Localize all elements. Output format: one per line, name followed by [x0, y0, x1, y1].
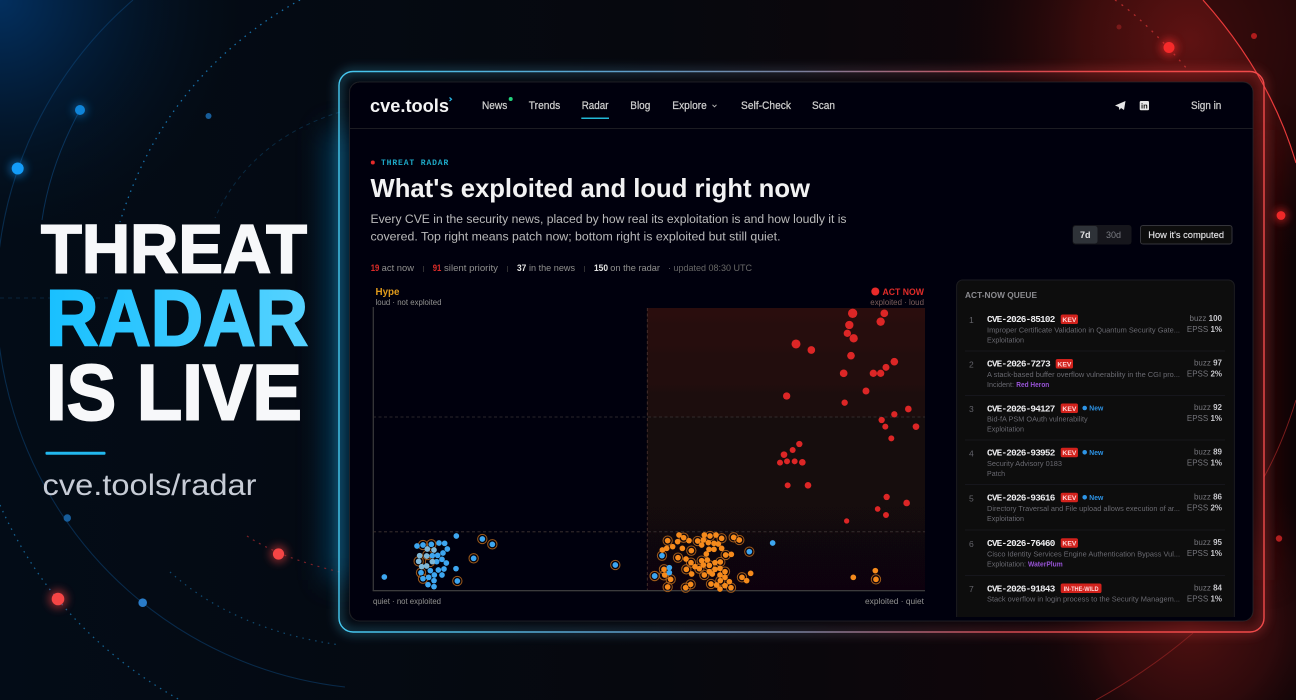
top navigation: Self-Check — [741, 100, 792, 112]
row 4: CVE-2026-93952 — [987, 448, 1056, 459]
queue heading: ACT-NOW QUEUE — [965, 290, 1037, 300]
page title: What's exploited and loud right now — [370, 175, 811, 203]
row 5 — [969, 492, 1223, 523]
row 1: EPSS 1% — [1187, 325, 1222, 334]
row 5: Exploitation — [987, 514, 1024, 523]
row 6 — [969, 538, 1223, 568]
row 3 — [969, 403, 1223, 434]
row 1: buzz 100 — [1190, 314, 1223, 323]
eyebrow: THREAT RADAR — [381, 159, 448, 168]
row 2: Red Heron — [1016, 380, 1050, 389]
row 6: EPSS 1% — [1187, 549, 1222, 558]
row 3: KEV — [1062, 406, 1077, 413]
row 5: CVE-2026-93616 — [987, 493, 1056, 504]
stats line: 37 — [517, 263, 526, 273]
headline — [41, 210, 308, 436]
row 1 — [969, 314, 1223, 344]
top navigation: Blog — [630, 100, 650, 112]
chart labels: exploited · quiet — [865, 597, 925, 606]
row 1: KEV — [1062, 317, 1077, 324]
background radar arcs, left — [0, 0, 345, 700]
row 4: EPSS 1% — [1187, 458, 1222, 468]
stats line: on the radar — [610, 263, 660, 273]
stats line: 19 — [371, 263, 379, 273]
row 4: buzz 89 — [1194, 448, 1223, 456]
row 6: CVE-2026-76460 — [987, 538, 1056, 549]
row 1: Improper Certificate Validation in Quantum Security Gate... — [987, 326, 1180, 334]
top navigation: Explore — [672, 100, 707, 112]
row 7: EPSS 1% — [1187, 594, 1222, 604]
stats line: 150 — [594, 263, 608, 273]
button: how it's computed — [1140, 226, 1232, 244]
row 2: A stack-based buffer overflow vulnerability in the CGI pro... — [987, 370, 1180, 379]
button: how it's computed: How it's computed — [1148, 230, 1224, 240]
row 6: buzz 95 — [1194, 538, 1223, 547]
description: Every CVE in the security news, placed by how real its exploitation is and how loudly it is — [370, 212, 846, 226]
act-now quadrant shading — [647, 308, 925, 590]
row 2: KEV — [1057, 361, 1072, 368]
row 2: Incident: — [987, 380, 1014, 389]
stats line: in the news — [529, 263, 575, 273]
row 3: buzz 92 — [1194, 403, 1223, 412]
row 1: 1 — [969, 315, 974, 325]
row 5: New — [1089, 493, 1104, 502]
row 4 — [969, 448, 1223, 478]
red points: act now — [777, 309, 919, 524]
row 3: Exploitation — [987, 424, 1024, 434]
background radar arcs, right — [1096, 0, 1296, 700]
top navigation: Scan — [812, 100, 835, 112]
row 5: Directory Traversal and File upload allows execution of ar... — [987, 504, 1180, 513]
row 6: 6 — [969, 539, 974, 549]
stats line — [371, 263, 752, 273]
chart labels: loud · not exploited — [376, 298, 442, 307]
row 2: CVE-2026-7273 — [987, 359, 1051, 370]
row 7: IN-THE-WILD — [1064, 586, 1099, 593]
accent divider — [46, 452, 106, 455]
panel: act-now queue — [957, 280, 1234, 617]
top navigation — [350, 95, 1253, 129]
row 4: KEV — [1062, 450, 1077, 457]
blue points: in the news — [381, 533, 659, 589]
row 7: buzz 84 — [1194, 584, 1223, 592]
headline: THREAT — [41, 210, 307, 288]
row 5: EPSS 2% — [1187, 504, 1222, 512]
row 4: New — [1089, 448, 1104, 457]
scatter chart — [373, 287, 925, 606]
logo: cve.tools — [370, 95, 449, 116]
headline: RADAR — [46, 274, 308, 362]
chart labels: exploited · loud — [870, 298, 924, 307]
row 4: 4 — [969, 448, 974, 458]
window toggle: 7d — [1080, 230, 1091, 240]
window toggle — [1072, 225, 1132, 244]
chart labels: ACT NOW — [882, 287, 924, 298]
icon: linkedin — [1140, 101, 1149, 111]
row 4: Security Advisory 0183 — [987, 459, 1062, 468]
top navigation: Radar — [582, 100, 609, 112]
top navigation: Trends — [529, 100, 561, 112]
top navigation: Sign in — [1191, 100, 1221, 112]
description — [370, 212, 846, 244]
stats line: act now — [382, 263, 414, 273]
window toggle: 30d — [1106, 230, 1121, 240]
row 2: EPSS 2% — [1187, 370, 1222, 378]
orange points: silent priority — [650, 531, 881, 592]
row 5: 5 — [969, 494, 974, 504]
row 3: 3 — [969, 404, 974, 414]
stats line: · updated 08:30 UTC — [668, 263, 752, 273]
row 6: KEV — [1062, 540, 1077, 548]
top navigation: News — [482, 100, 508, 112]
panel: app window — [350, 82, 1253, 621]
row 3: New — [1089, 404, 1104, 413]
row 3: CVE-2026-94127 — [987, 403, 1055, 414]
row 7: Stack overflow in login process to the Security Managem... — [987, 594, 1180, 604]
description: covered. Top right means patch now; bottom right is exploited but still quiet. — [370, 230, 780, 244]
chart labels: quiet · not exploited — [373, 597, 441, 606]
icon: telegram — [1115, 101, 1126, 110]
row 5: buzz 86 — [1194, 492, 1223, 502]
row 7: 7 — [969, 584, 974, 594]
chart labels: Hype — [376, 287, 400, 298]
chart labels — [373, 287, 925, 606]
row 5: KEV — [1062, 495, 1077, 502]
row 2: buzz 97 — [1194, 358, 1223, 368]
row 6: Cisco Identity Services Engine Authentication Bypass Vul... — [987, 549, 1180, 558]
headline: IS LIVE — [46, 348, 302, 436]
row 4: Patch — [987, 469, 1005, 478]
row 3: Bid-fA PSM OAuth vulnerability — [987, 414, 1088, 424]
row 2 — [969, 358, 1223, 389]
icon: linkedin: in — [1141, 102, 1148, 111]
stats line: silent priority — [444, 263, 498, 273]
stats line: 91 — [433, 263, 441, 273]
row 7 — [969, 583, 1223, 604]
row 6: WaterPlum — [1028, 559, 1063, 568]
url: cve.tools/radar — [42, 469, 257, 502]
row 2: 2 — [969, 360, 974, 370]
browser frame — [339, 72, 1264, 632]
row 1: Exploitation — [987, 336, 1024, 344]
row 7: CVE-2026-91843 — [987, 583, 1056, 594]
row 3: EPSS 1% — [1187, 414, 1222, 423]
row 6: Exploitation: — [987, 559, 1026, 568]
row 1: CVE-2026-85102 — [987, 314, 1056, 325]
